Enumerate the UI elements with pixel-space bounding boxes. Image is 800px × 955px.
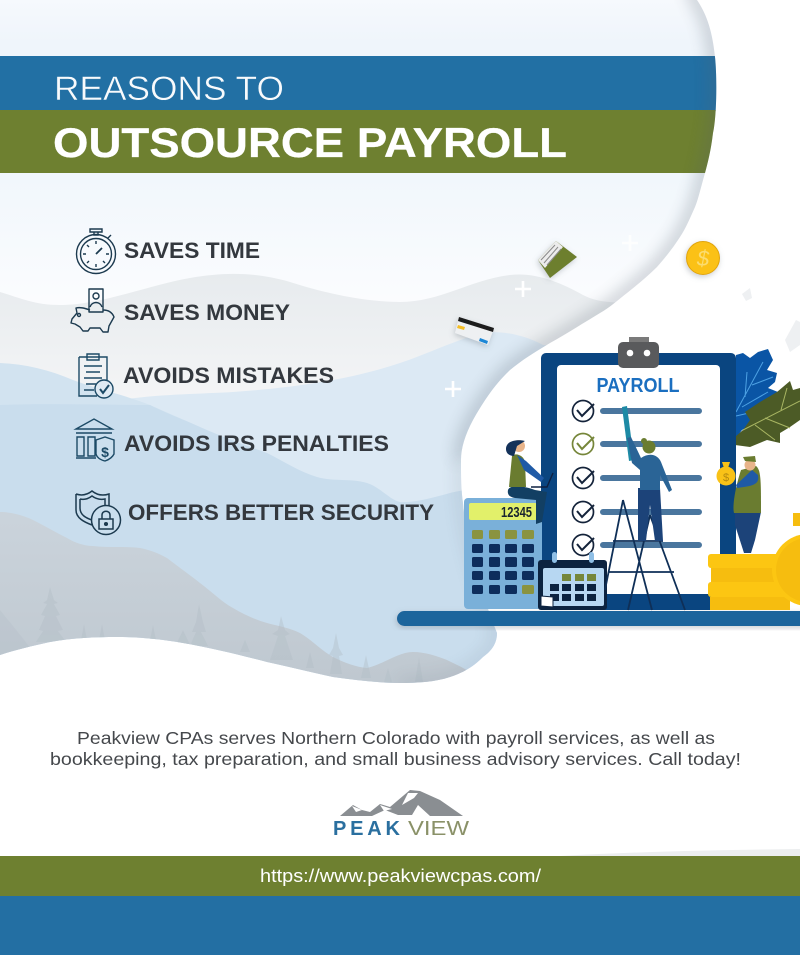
checklist marks (572, 400, 594, 556)
trees (50, 589, 368, 668)
footer green band (0, 856, 800, 896)
heading: outsource payroll: OUTSOURCE PAYROLL (53, 119, 567, 166)
stopwatch (772, 513, 800, 606)
calendar cells (550, 574, 596, 601)
footer (0, 849, 800, 955)
person with money bag (716, 456, 761, 553)
display number: 12345 (501, 505, 532, 521)
person seated with laptop (506, 440, 553, 524)
person on ladder with pen (622, 406, 672, 541)
icon: credit card (455, 317, 494, 345)
description text: bookkeeping, tax preparation, and small business advisory services. Call today! (50, 749, 741, 769)
calculator display (469, 503, 537, 520)
icon: piggy bank (71, 289, 114, 332)
calendar rings (552, 552, 594, 563)
logo wordmark peak: PEAK (333, 818, 401, 840)
faint shapes (742, 288, 800, 352)
icon: stopwatch (76, 229, 116, 274)
clipboard (541, 337, 736, 610)
blob inner edge shadow lower (450, 468, 497, 676)
calculator keys (472, 530, 534, 594)
clipboard title: PAYROLL (596, 375, 680, 397)
icon: bank with shield (76, 419, 114, 461)
background blob with layered mountains (0, 0, 716, 683)
logo mountains (340, 790, 463, 816)
coins and large stopwatch (708, 513, 800, 610)
footer blue band (0, 896, 800, 955)
label: saves time: SAVES TIME (124, 238, 260, 263)
clipboard clip (618, 337, 659, 368)
icon: dollar coin: $ (696, 246, 710, 271)
icon: envelope (538, 241, 577, 278)
logo wordmark view: VIEW (408, 818, 469, 840)
label: offers better security: OFFERS BETTER SECURITY (128, 500, 434, 525)
logo (333, 790, 469, 840)
label: avoids irs penalties: AVOIDS IRS PENALTIES (124, 431, 389, 456)
heading: reasons to: REASONS TO (54, 70, 284, 108)
banner: green (0, 110, 730, 173)
icon: clipboard check (79, 354, 113, 398)
illustration: leaves (735, 349, 800, 447)
money bag: $ (723, 472, 729, 484)
list: reasons (71, 229, 434, 534)
ladder (605, 500, 685, 610)
icon: green leaf (735, 381, 800, 447)
footer url: https://www.peakviewcpas.com/ (260, 866, 541, 886)
icon glyph: dollar: $ (101, 444, 109, 460)
label: avoids mistakes: AVOIDS MISTAKES (123, 363, 334, 388)
label: saves money: SAVES MONEY (124, 300, 290, 325)
icon: shield with lock (76, 491, 120, 534)
description text (50, 728, 741, 769)
calendar (538, 552, 607, 610)
illustration: floating items (445, 235, 800, 397)
banner: blue (0, 56, 730, 111)
icon: dollar coin (686, 242, 720, 274)
icon: plus marks (445, 235, 638, 397)
shelf (397, 611, 800, 626)
calculator (464, 498, 542, 609)
description text: Peakview CPAs serves Northern Colorado with payroll services, as well as (77, 728, 715, 748)
icon: blue leaf (736, 349, 778, 438)
blob inner edge shadow upper (461, 0, 716, 460)
checklist lines (603, 411, 699, 545)
